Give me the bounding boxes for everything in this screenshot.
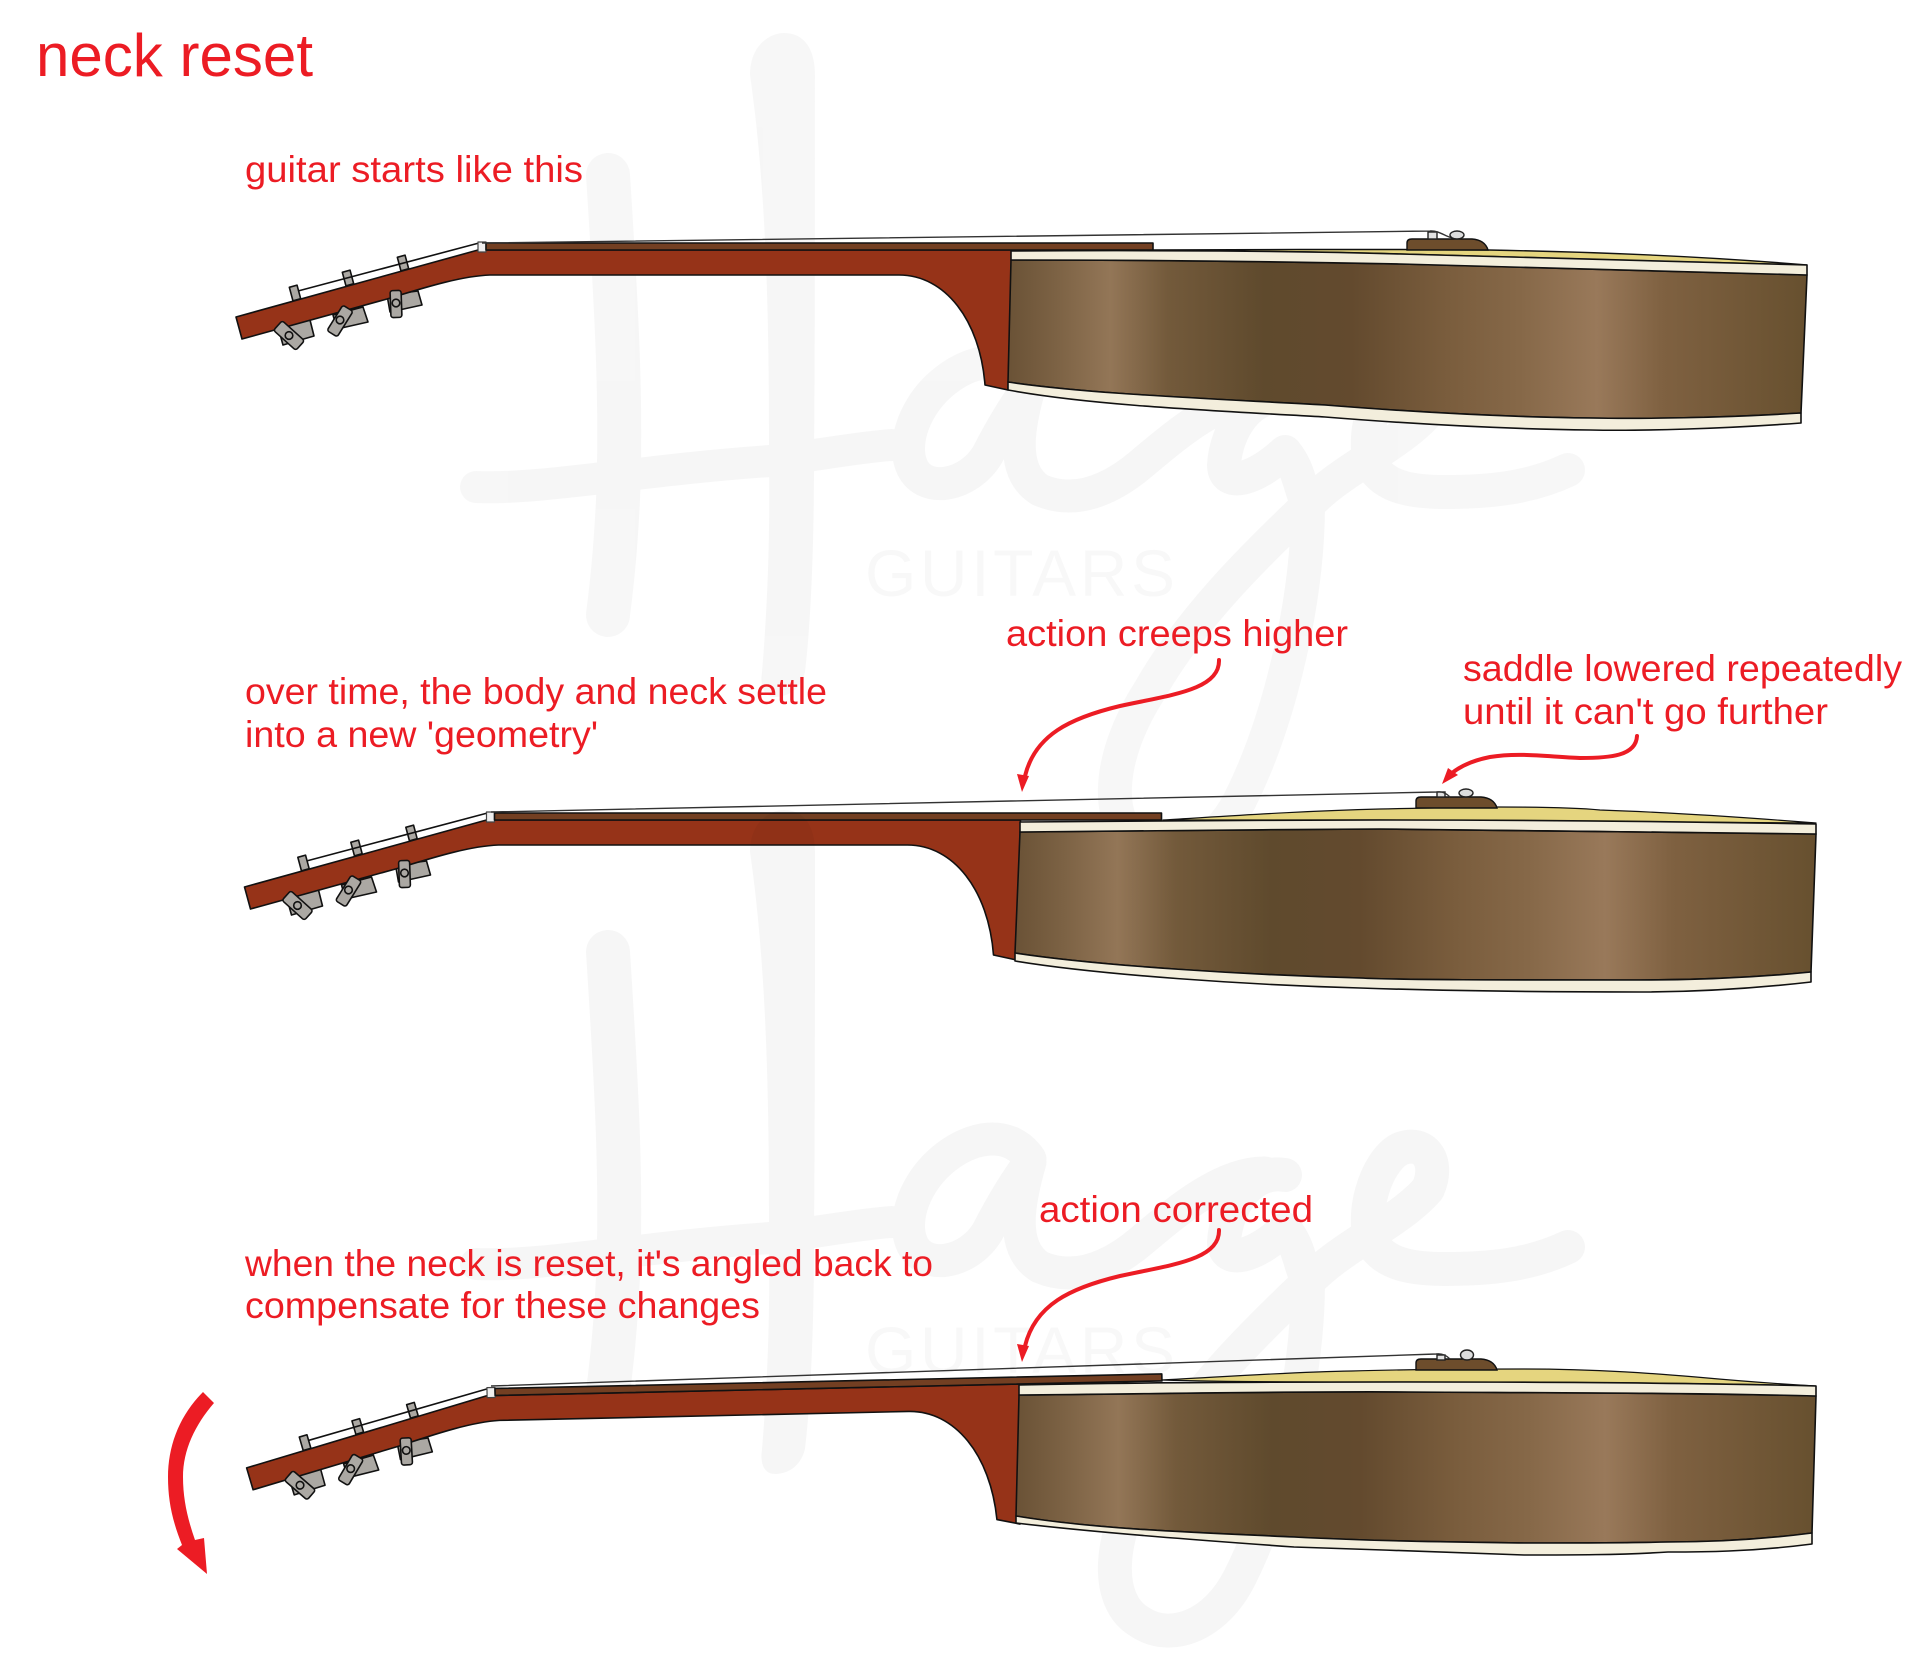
guitar 1: original geometry — [236, 231, 1807, 430]
caption: saddle lowered: saddle lowered repeatedly — [1463, 648, 1903, 689]
caption: guitar starts like this: guitar starts like this — [245, 149, 583, 190]
guitar 1 bridge — [1407, 239, 1488, 250]
guitar 1 neck and headstock — [236, 242, 1153, 390]
caption: saddle lowered: until it can't go further — [1463, 691, 1828, 732]
watermark logo: upper: GUITARS — [865, 536, 1175, 610]
arrow: action creeps higher — [1017, 660, 1219, 792]
watermark logo: upper — [476, 33, 1568, 854]
title: neck reset — [36, 22, 313, 89]
guitar 2 saddle, pin and string — [491, 789, 1473, 812]
guitar 2: settled geometry — [244, 789, 1816, 992]
arrow: action corrected — [1017, 1230, 1219, 1362]
guitar 1 body — [1008, 250, 1807, 430]
watermark logo: lower: GUITARS — [865, 1313, 1175, 1387]
guitar 2 bridge — [1416, 797, 1497, 808]
guitar 3: neck reset — [245, 1350, 1816, 1555]
caption: action corrected: action corrected — [1039, 1189, 1313, 1230]
caption: over time — [245, 671, 827, 755]
caption: over time: into a new 'geometry' — [245, 714, 598, 755]
guitar 3 body — [1016, 1369, 1816, 1555]
guitar 1 saddle, pin and string — [482, 231, 1464, 243]
guitar 3 neck and headstock — [245, 1373, 1165, 1541]
guitar 3 saddle, pin and string — [491, 1350, 1474, 1386]
caption: when the neck is reset — [244, 1243, 933, 1326]
caption: saddle lowered — [1463, 648, 1903, 732]
guitar 3 bridge — [1416, 1359, 1497, 1370]
guitar 2 body — [1015, 807, 1816, 992]
caption: when the neck is reset: when the neck is reset, it's angled back to — [244, 1243, 933, 1284]
caption: when the neck is reset: compensate for these changes — [245, 1285, 760, 1326]
caption: over time: over time, the body and neck settle — [245, 671, 827, 712]
watermark logo: lower — [476, 810, 1568, 1631]
arrow: saddle lowered — [1442, 736, 1637, 784]
arrow: neck rotation — [168, 1392, 214, 1574]
guitar 2 neck and headstock — [244, 812, 1162, 960]
caption: action creeps higher: action creeps higher — [1006, 613, 1348, 654]
